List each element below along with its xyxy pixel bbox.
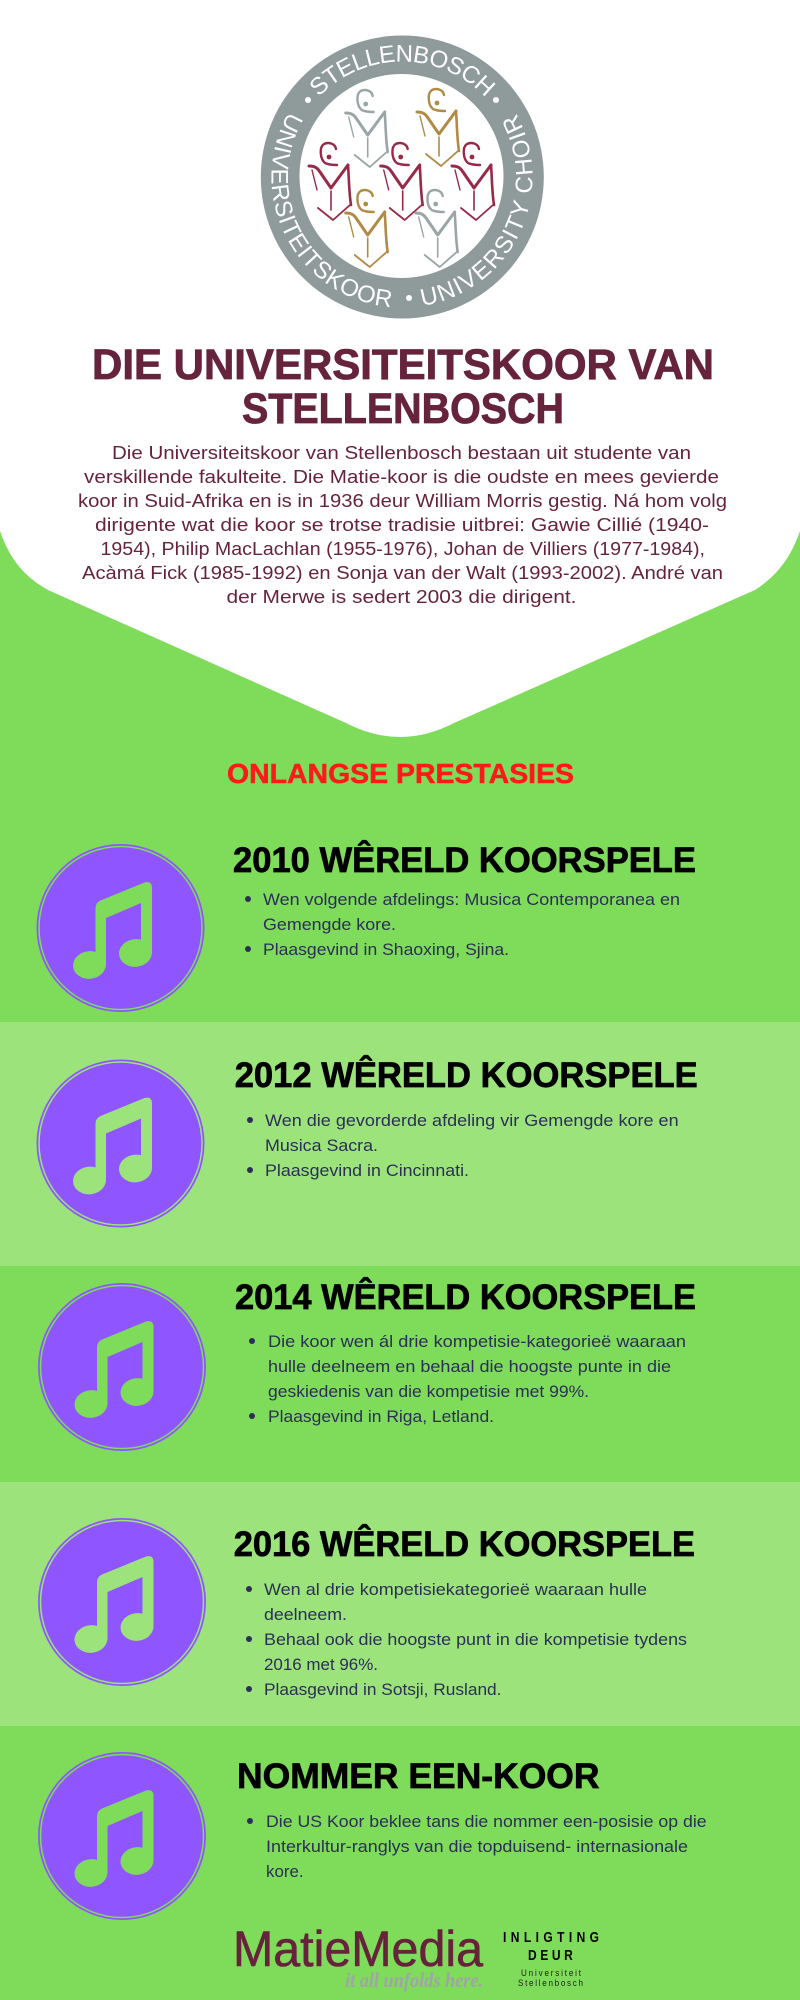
intro paragraph [78,443,727,607]
panel text: 2014: hulle deelneem en behaal die hoogste punte in die [268,1357,671,1376]
title: DIE UNIVERSITEITSKOOR VAN [92,342,714,389]
title: STELLENBOSCH [242,386,564,433]
panel text: 2016: Behaal ook die hoogste punt in die kompetisie tydens [264,1630,687,1649]
logo: Stellenbosch University Choir seal [260,36,544,318]
icon: music note nommer een [38,1752,206,1920]
band: 2012 background [0,1022,800,1266]
panel text: 2014: Plaasgevind in Riga, Letland. [268,1407,494,1426]
panel text: 2012: Plaasgevind in Cincinnati. [265,1161,469,1180]
title [92,342,714,433]
panel text: 2016 [234,1524,695,1699]
logo: Inligting Deur: INLIGTING [503,1929,599,1945]
icon: music note 2012 [36,1060,204,1228]
logo: Stellenbosch University Choir seal: UNIVERSITEITSKOOR [271,115,391,308]
panel text: 2014: geskiedenis van die kompetisie met 99%. [268,1382,589,1401]
panel text: 2016: Wen al drie kompetisiekategorieë waaraan hulle [264,1580,647,1599]
panel text: 2012: Musica Sacra. [265,1136,378,1155]
panel text: 2012 [235,1055,698,1180]
intro paragraph: Acàmá Fick (1985-1992) en Sonja van der Walt (1993-2002). André van [82,563,723,583]
panel text: 2014: Die koor wen ál drie kompetisie-kategorieë waaraan [268,1332,686,1351]
panel text: 2016: deelneem. [264,1605,347,1624]
panel text: 2016: Plaasgevind in Sotsji, Rusland. [264,1680,502,1699]
panel text: 2012: 2012 WÊRELD KOORSPELE [235,1055,698,1095]
panel text: 2010: 2010 WÊRELD KOORSPELE [233,840,696,880]
icon: music note 2010 [36,844,204,1012]
logo: Stellenbosch University Choir seal: STELLENBOSCH [310,45,496,96]
logo: Inligting Deur: DEUR [528,1947,573,1963]
logo: MatieMedia: it all unfolds here. [345,1968,483,1992]
band: 2016 background [0,1482,800,1726]
intro paragraph: dirigente wat die koor se trotse tradisie uitbrei: Gawie Cillié (1940- [95,515,709,535]
logo: Stellenbosch University Choir seal: UNIVERSITY CHOIR [420,114,533,305]
panel text: 2010: Wen volgende afdelings: Musica Contemporanea en [263,890,680,909]
panel text: nommer een-koor [237,1757,707,1881]
panel text: nommer een-koor: Interkultur-ranglys van die topduisend- internasionale [266,1837,688,1856]
intro paragraph: Die Universiteitskoor van Stellenbosch bestaan uit studente van [112,443,691,463]
section heading: onlangse prestasies: ONLANGSE PRESTASIES [227,758,574,789]
panel text: 2014: 2014 WÊRELD KOORSPELE [235,1277,696,1317]
panel text: 2016: 2016 WÊRELD KOORSPELE [234,1524,695,1564]
panel text: 2010 [233,840,696,959]
logo: Inligting Deur: Stellenbosch [518,1977,583,1988]
panel text: 2016: 2016 met 96%. [264,1655,378,1674]
panel text: nommer een-koor: kore. [266,1862,304,1881]
intro paragraph: koor in Suid-Afrika en is in 1936 deur William Morris gestig. Ná hom volg [78,491,727,511]
icon: music note 2014 [38,1283,206,1451]
white header shape [0,0,800,737]
panel text: 2014 [235,1277,696,1426]
logo: Inligting Deur: Universiteit [521,1967,582,1978]
intro paragraph: 1954), Philip MacLachlan (1955-1976), Johan de Villiers (1977-1984), [100,539,705,559]
logo: MatieMedia: MatieMedia [233,1921,483,1977]
intro paragraph: verskillende fakulteite. Die Matie-koor is die oudste en mees gevierde [84,467,719,487]
panel text: nommer een-koor: Die US Koor beklee tans die nommer een-posisie op die [266,1812,707,1831]
intro paragraph: der Merwe is sedert 2003 die dirigent. [226,587,576,607]
panel text: nommer een-koor: NOMMER EEN-KOOR [237,1757,600,1796]
panel text: 2010: Plaasgevind in Shaoxing, Sjina. [263,940,509,959]
icon: music note 2016 [38,1518,206,1686]
panel text: 2010: Gemengde kore. [263,915,396,934]
logo: Inligting Deur [503,1929,599,1988]
panel text: 2012: Wen die gevorderde afdeling vir Gemengde kore en [265,1111,679,1130]
